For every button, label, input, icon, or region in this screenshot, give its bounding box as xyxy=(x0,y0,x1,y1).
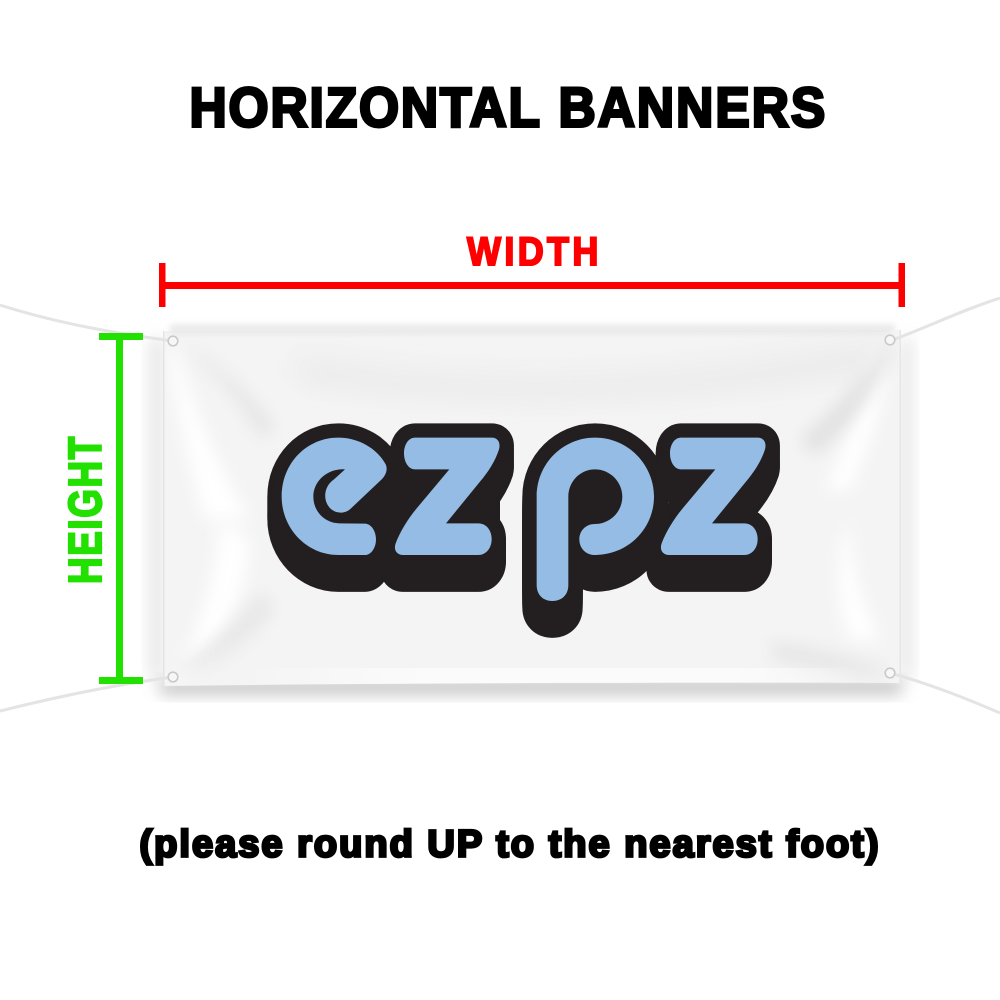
logo: ezpz xyxy=(282,438,766,601)
grommet: bottom right xyxy=(885,668,895,678)
banner xyxy=(150,320,912,694)
logo dark outline and drop extrusion xyxy=(282,438,766,601)
rope: bottom right xyxy=(890,673,1000,713)
banner cloth xyxy=(163,330,901,686)
footnote: (please round UP to the nearest foot) xyxy=(140,824,878,866)
logo blue letters xyxy=(282,438,766,601)
cloth folds xyxy=(163,320,901,686)
rope: top left xyxy=(0,305,173,341)
rope: bottom left xyxy=(0,677,173,711)
title: BANNERS xyxy=(558,77,825,139)
width dimension arrow xyxy=(159,263,905,307)
height label: HEIGHT xyxy=(59,437,111,584)
grommet: bottom left xyxy=(168,672,178,682)
logo dark fill between letters xyxy=(375,450,750,570)
title xyxy=(190,77,825,139)
height dimension arrow xyxy=(99,333,143,684)
width label: WIDTH xyxy=(467,230,598,274)
rope: top right xyxy=(890,298,1000,341)
title: HORIZONTAL xyxy=(190,77,540,139)
banner drop shadow xyxy=(150,324,912,694)
grommet: top left xyxy=(168,336,178,346)
grommet: top right xyxy=(885,335,895,345)
